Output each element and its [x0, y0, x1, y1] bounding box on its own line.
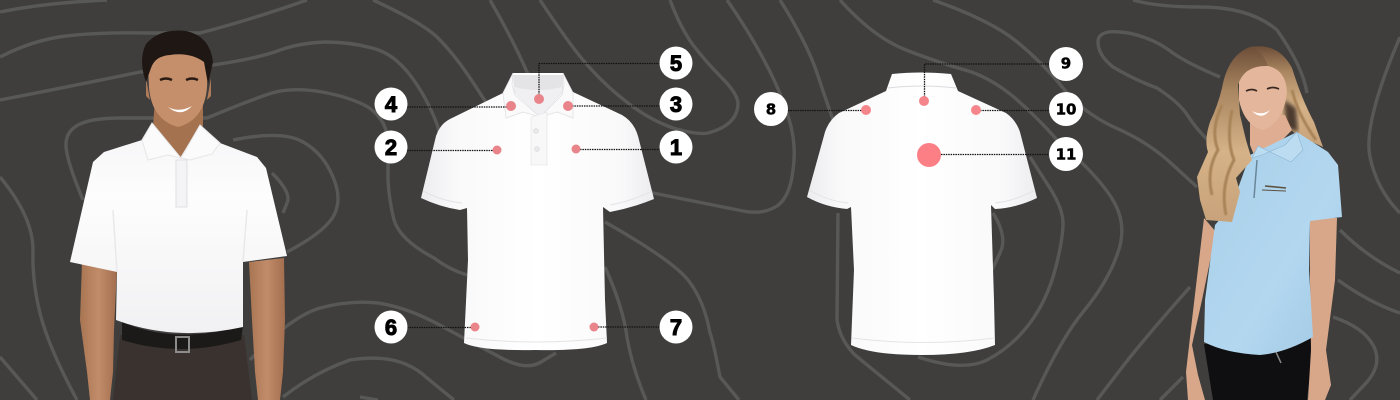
callout 1: 1 — [670, 135, 682, 160]
back polo shirt — [807, 72, 1037, 355]
callout 3: 3 — [670, 92, 682, 117]
front hair lock — [1197, 47, 1268, 222]
shirt — [70, 123, 287, 333]
collar inside — [513, 75, 563, 117]
callout 5 — [534, 46, 692, 104]
collar fold — [888, 86, 956, 88]
callout 11 — [917, 137, 1083, 171]
sleeve hems — [423, 191, 652, 342]
callout 6 — [374, 310, 480, 344]
trousers — [113, 335, 252, 400]
callout 2: 2 — [385, 135, 397, 160]
arms — [80, 262, 117, 400]
callout 10 — [971, 92, 1083, 126]
callout 9 — [919, 47, 1083, 106]
callout 9: 9 — [1061, 54, 1071, 72]
callout 5: 5 — [670, 51, 682, 76]
face — [160, 78, 198, 80]
belt buckle — [176, 337, 189, 352]
belt — [122, 322, 243, 349]
hair behind neck — [1240, 46, 1323, 147]
hair shadow — [1284, 100, 1298, 132]
placket — [1254, 160, 1257, 198]
callout 8 — [754, 92, 871, 126]
callout 11: 11 — [1056, 146, 1076, 164]
neck and face — [1250, 115, 1292, 165]
collar flaps — [503, 73, 573, 118]
waistband zip — [1276, 352, 1281, 363]
callout 10: 10 — [1056, 100, 1076, 118]
shirt body and sleeves — [421, 73, 654, 350]
blue shirt — [1204, 132, 1342, 355]
hair — [142, 31, 213, 84]
callout 6: 6 — [385, 315, 397, 340]
trousers — [1204, 336, 1314, 400]
neck and head — [153, 100, 203, 160]
callout 1 — [572, 130, 692, 164]
ears — [146, 78, 211, 100]
front polo shirt — [421, 73, 654, 350]
callout 8: 8 — [766, 100, 776, 118]
placket and buttons — [531, 112, 547, 165]
callout 2 — [374, 130, 502, 164]
shirt body and sleeves — [807, 72, 1037, 355]
arms — [1186, 218, 1216, 400]
embroidered logo — [1262, 186, 1286, 191]
callout 3 — [563, 88, 692, 120]
collar — [1252, 132, 1303, 162]
callout 4: 4 — [385, 92, 398, 117]
hair waves — [1210, 90, 1316, 215]
callout 4 — [374, 88, 516, 120]
collar and placket — [142, 123, 220, 160]
callout 7: 7 — [670, 315, 682, 340]
man in white polo — [70, 31, 287, 400]
seams and hems — [809, 190, 1035, 342]
callout 7 — [590, 310, 692, 344]
woman in light blue polo — [1186, 46, 1342, 400]
